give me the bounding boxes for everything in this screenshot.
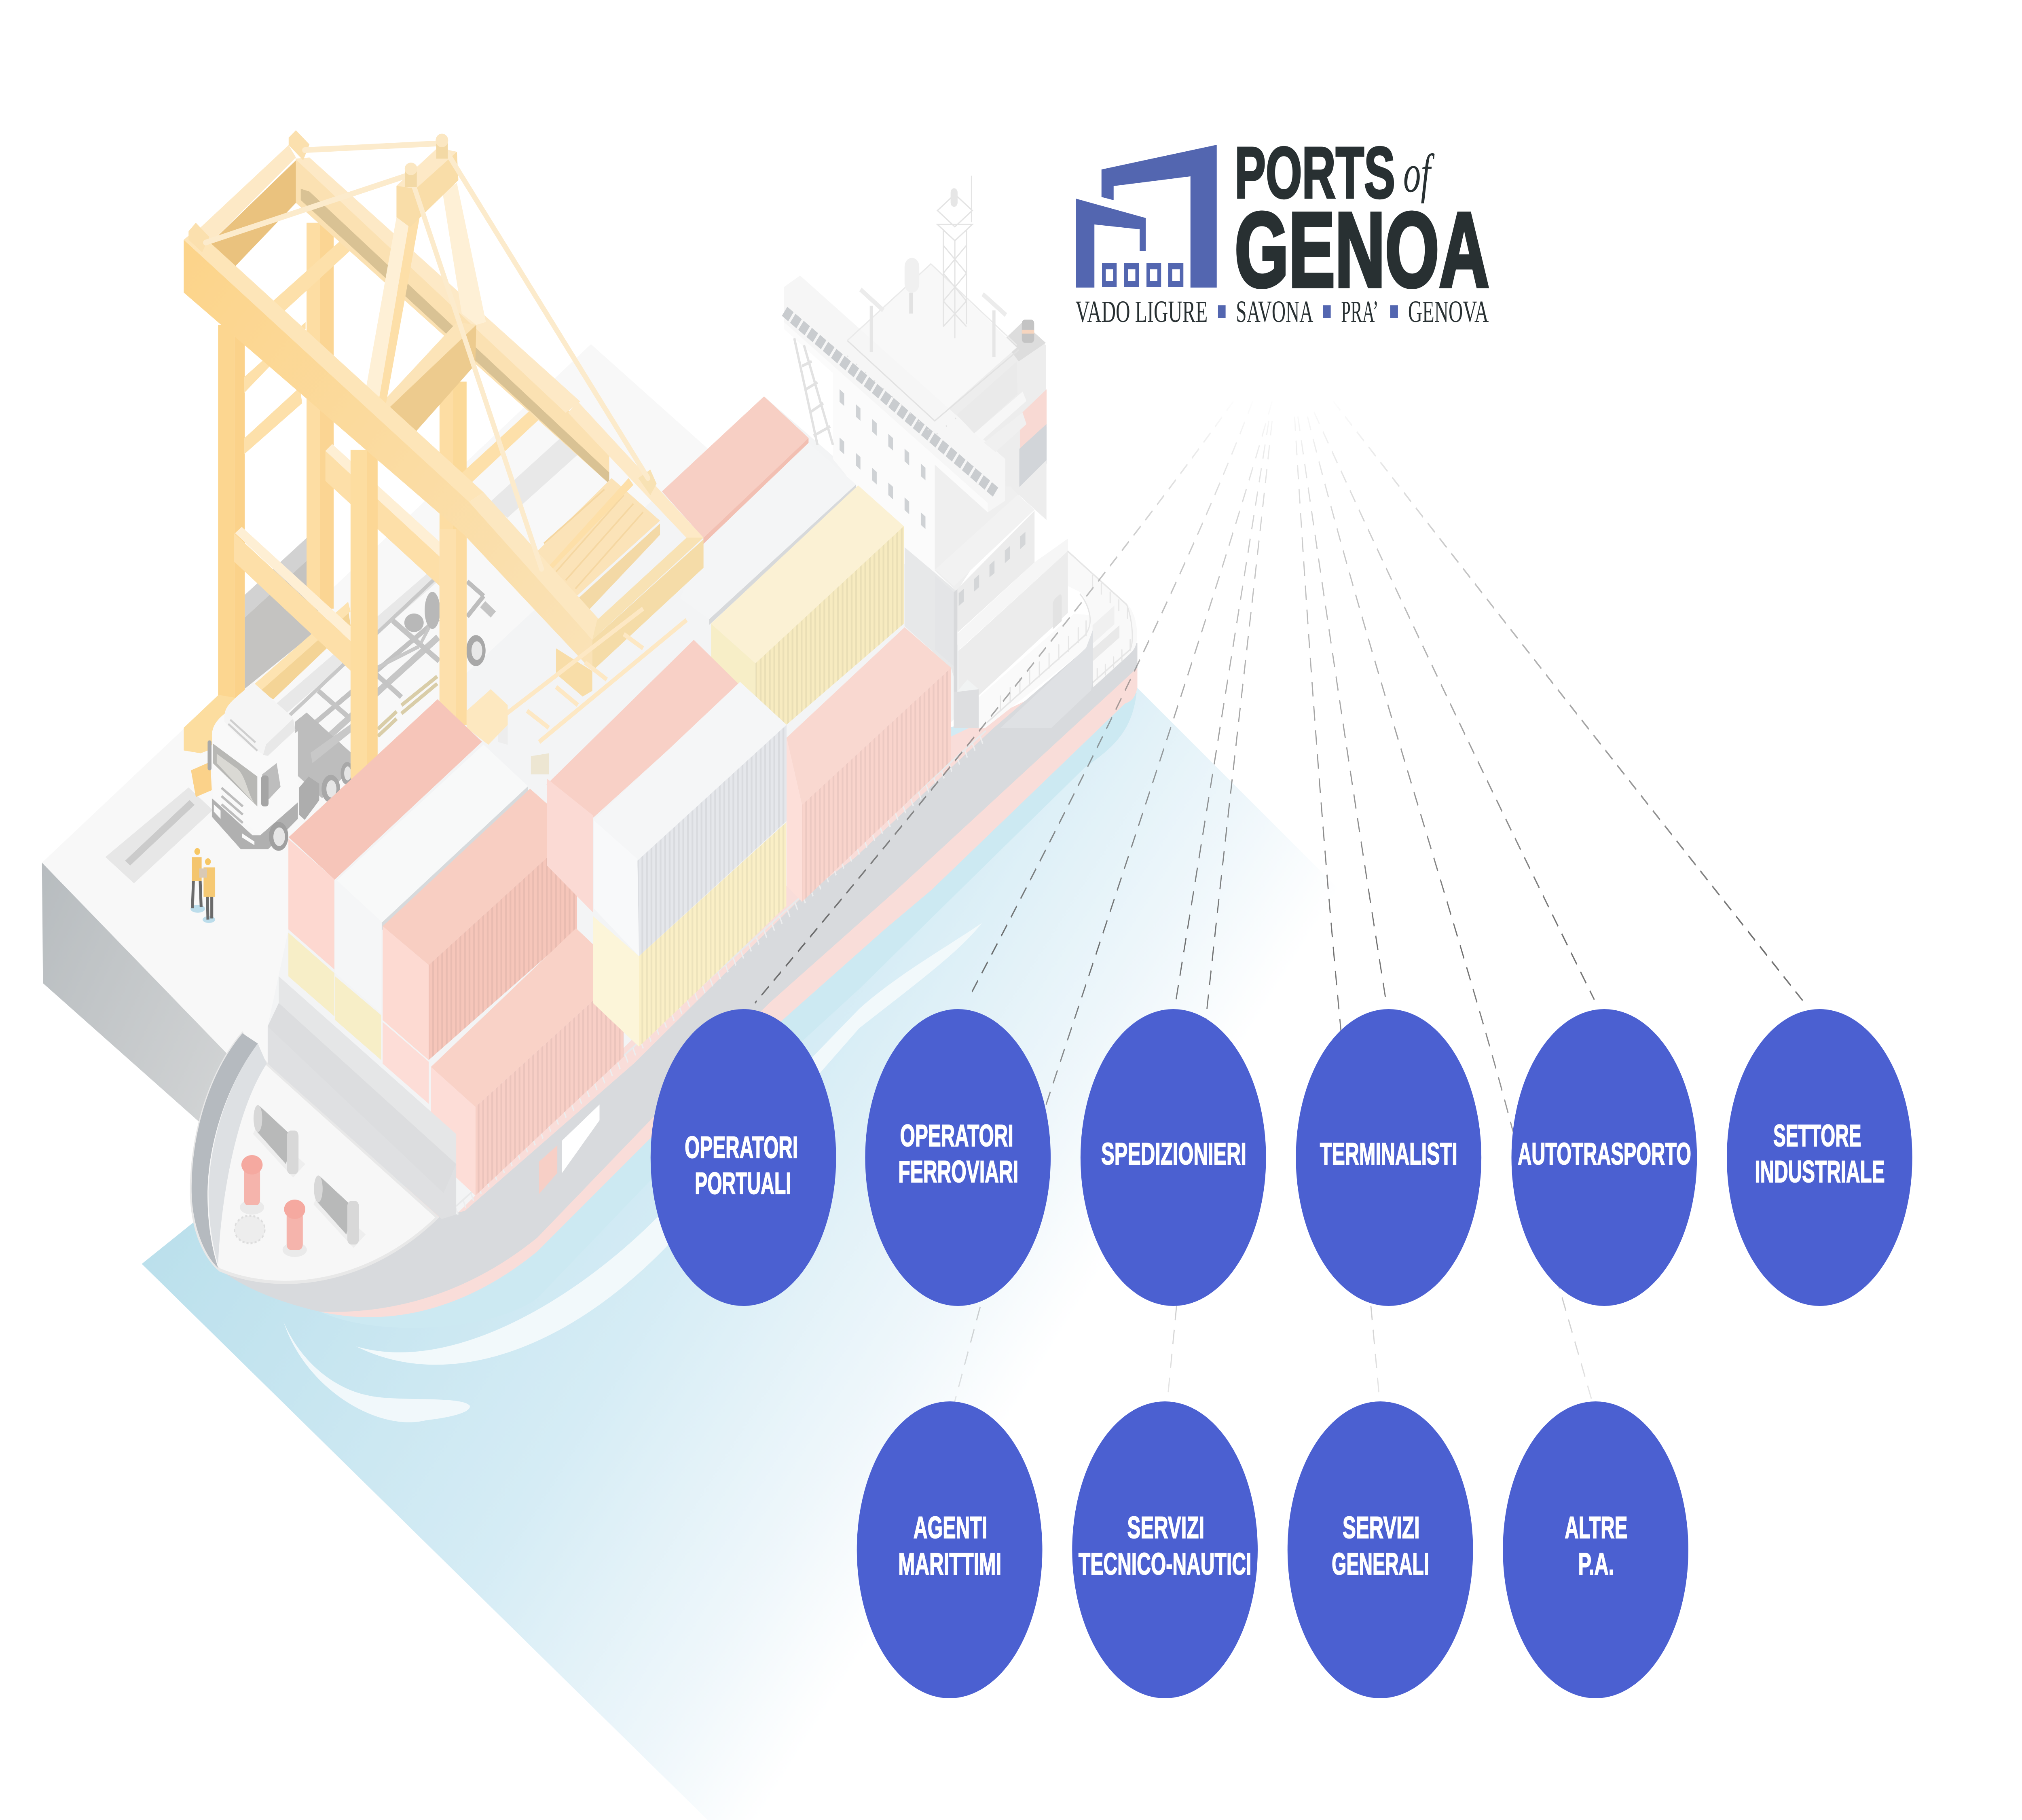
windlass 2 xyxy=(313,1175,366,1248)
tower side wall xyxy=(935,463,1019,591)
tower rear wall xyxy=(1005,460,1047,520)
terraces xyxy=(957,362,1017,434)
funnel block wall xyxy=(935,331,1046,487)
node: operatori ferroviari xyxy=(865,1009,1051,1306)
concrete block behind crane xyxy=(245,536,321,689)
node: autotrasporto: AUTOTRASPORTO xyxy=(1518,1137,1691,1171)
back legs xyxy=(307,223,467,725)
node: servizi generali: SERVIZI xyxy=(1343,1511,1420,1545)
container white C xyxy=(335,745,528,1013)
pink lower small xyxy=(383,1022,429,1104)
quay xyxy=(42,344,885,1132)
deck xyxy=(268,396,986,1215)
node: autotrasporto xyxy=(1512,1009,1697,1306)
container yellow base second xyxy=(335,976,381,1060)
door xyxy=(1053,594,1062,629)
logo xyxy=(1075,132,1489,329)
aft roof xyxy=(935,495,1034,586)
ladder walkway xyxy=(503,609,687,742)
windlass 1 xyxy=(253,1105,305,1177)
mid-ship block xyxy=(905,547,957,686)
node: servizi tecnico-nautici: SERVIZI xyxy=(1127,1511,1204,1545)
bow deck xyxy=(191,976,456,1282)
poop deck xyxy=(1068,551,1137,687)
container pink D xyxy=(288,699,482,969)
bridge top deck xyxy=(846,264,1017,419)
node: agenti marittimi: AGENTI xyxy=(914,1511,987,1545)
front wheel xyxy=(269,822,288,851)
top back girder xyxy=(296,159,609,484)
crane head xyxy=(396,148,458,227)
node: settore industriale xyxy=(1727,1009,1912,1306)
node: operatori portuali: PORTUALI xyxy=(695,1167,791,1201)
node: terminalisti: TERMINALISTI xyxy=(1320,1137,1457,1171)
crane rear leg and sill xyxy=(184,325,351,797)
small block xyxy=(954,689,979,728)
bulwark dark band xyxy=(192,1033,258,1268)
workers xyxy=(190,848,215,923)
trolley bracket xyxy=(556,648,592,696)
knuckle block xyxy=(289,130,309,160)
logo wordmark ports: PORTS xyxy=(1235,132,1395,213)
node: operatori ferroviari: FERROVIARI xyxy=(898,1155,1018,1189)
logo location savona: SAVONA xyxy=(1236,295,1313,329)
darker water beside hull xyxy=(320,693,1137,1328)
fuel tank xyxy=(299,777,319,820)
boom end frame xyxy=(568,402,704,540)
rail groove xyxy=(106,787,213,883)
node: altre p.a. xyxy=(1503,1401,1688,1698)
worker right xyxy=(199,858,215,923)
mast lattice xyxy=(937,176,972,338)
logo location vado ligure: VADO LIGURE xyxy=(1075,295,1208,329)
node: settore industriale: SETTORE xyxy=(1773,1119,1861,1153)
node: servizi tecnico-nautici xyxy=(1072,1401,1258,1698)
node: spedizionieri xyxy=(1081,1009,1266,1306)
mirrors xyxy=(261,775,269,806)
node: servizi tecnico-nautici: TECNICO-NAUTICI xyxy=(1079,1547,1251,1581)
logo separator 1 xyxy=(1218,305,1226,318)
portal ties xyxy=(234,444,440,671)
aft section xyxy=(935,424,1137,728)
right sill xyxy=(467,689,508,745)
bridge wing xyxy=(784,275,1005,512)
side wall block xyxy=(935,576,954,667)
logo containers xyxy=(1102,263,1183,287)
wave wake upper xyxy=(356,923,982,1365)
container yellow upper xyxy=(711,485,904,751)
logo separator 3 xyxy=(1390,305,1398,318)
bollard 1 xyxy=(240,1155,264,1215)
lower aft wall xyxy=(958,551,1068,695)
left brace underside xyxy=(208,160,296,267)
cross braces xyxy=(244,227,547,485)
node: servizi generali: GENERALI xyxy=(1332,1547,1429,1581)
mid beam underside xyxy=(387,325,476,433)
logo location genova: GENOVA xyxy=(1408,295,1489,329)
wave wake lower xyxy=(283,1322,470,1422)
rear wheels xyxy=(425,592,440,629)
node: terminalisti xyxy=(1296,1009,1481,1306)
side window xyxy=(262,763,281,799)
breakwater wall xyxy=(268,976,456,1219)
hull grey side xyxy=(218,643,1137,1312)
front containers xyxy=(288,640,787,1196)
logo building back xyxy=(1102,145,1217,288)
front legs xyxy=(351,450,467,779)
node: altre p.a.: ALTRE xyxy=(1565,1511,1627,1545)
aft wall with windows xyxy=(954,511,1034,633)
container yellow below F xyxy=(593,822,786,1047)
aft rails xyxy=(988,551,1132,722)
container pink A xyxy=(431,928,624,1196)
quay wall xyxy=(42,863,235,1122)
truck xyxy=(207,569,493,851)
back containers xyxy=(662,396,951,902)
cab body xyxy=(212,711,298,835)
bumper xyxy=(212,798,298,849)
main girder top xyxy=(184,230,484,502)
logo building front xyxy=(1076,199,1146,288)
radar dome xyxy=(905,258,919,293)
hull notch xyxy=(1000,629,1093,728)
node: servizi generali xyxy=(1288,1401,1473,1698)
container white ribbed F xyxy=(594,682,787,956)
grille xyxy=(222,788,243,823)
hull pink boot xyxy=(320,647,1137,1317)
node: agenti marittimi xyxy=(857,1401,1043,1698)
access ladder xyxy=(794,338,833,445)
hull white stripe and marks xyxy=(562,1105,599,1173)
quay top surface xyxy=(42,344,885,1132)
cables xyxy=(205,143,648,569)
mast dome xyxy=(951,188,958,207)
funnel xyxy=(1022,320,1034,343)
radars xyxy=(861,290,883,310)
container pink B xyxy=(383,789,577,1060)
trailer chassis xyxy=(289,578,493,755)
right strut xyxy=(442,183,486,325)
main girder face xyxy=(184,240,592,671)
container yellow base left xyxy=(288,933,334,1016)
windshield xyxy=(213,743,257,806)
tower front face xyxy=(833,371,957,626)
node: spedizionieri: SPEDIZIONIERI xyxy=(1101,1137,1246,1171)
bollard 2 xyxy=(283,1200,307,1257)
container pink E xyxy=(546,640,740,912)
side guards xyxy=(378,676,437,736)
cab roof xyxy=(224,683,295,756)
logo separator 2 xyxy=(1323,305,1331,318)
logo wordmark of: of xyxy=(1403,144,1435,204)
deck grate xyxy=(235,1216,265,1243)
superstructure xyxy=(784,176,1047,686)
knobs xyxy=(405,133,448,187)
tractor body xyxy=(295,713,351,798)
boom end top and face xyxy=(592,538,704,640)
container pink back xyxy=(662,396,808,538)
crane xyxy=(184,130,704,779)
logo location pra: PRA’ xyxy=(1341,295,1379,329)
ship xyxy=(218,176,1137,1317)
dashed connector lines xyxy=(755,401,1807,1402)
container white back xyxy=(680,443,856,619)
left strut xyxy=(363,217,410,416)
node: operatori portuali xyxy=(651,1009,836,1306)
bulwark light band xyxy=(209,1043,266,1265)
node: settore industriale: INDUSTRIALE xyxy=(1755,1155,1885,1189)
tractor wheels xyxy=(321,775,340,803)
node: operatori ferroviari: OPERATORI xyxy=(900,1119,1013,1153)
tower windows xyxy=(840,389,925,529)
node: agenti marittimi: MARITTIMI xyxy=(898,1547,1001,1581)
node: altre p.a.: P.A. xyxy=(1578,1547,1614,1581)
logo wordmark genoa: GENOA xyxy=(1235,191,1489,309)
water surface xyxy=(142,687,1542,1820)
rail band xyxy=(958,539,1068,651)
container pink right xyxy=(787,627,951,902)
node: operatori portuali: OPERATORI xyxy=(685,1131,798,1165)
worker left xyxy=(190,848,205,913)
hull rail xyxy=(456,736,986,1211)
trailer bed xyxy=(277,569,440,713)
roof vents xyxy=(228,720,257,751)
railings on bridge deck xyxy=(847,341,1019,421)
bow deck surface xyxy=(191,1033,437,1282)
aft deck xyxy=(979,614,1093,728)
spreader xyxy=(536,470,660,612)
